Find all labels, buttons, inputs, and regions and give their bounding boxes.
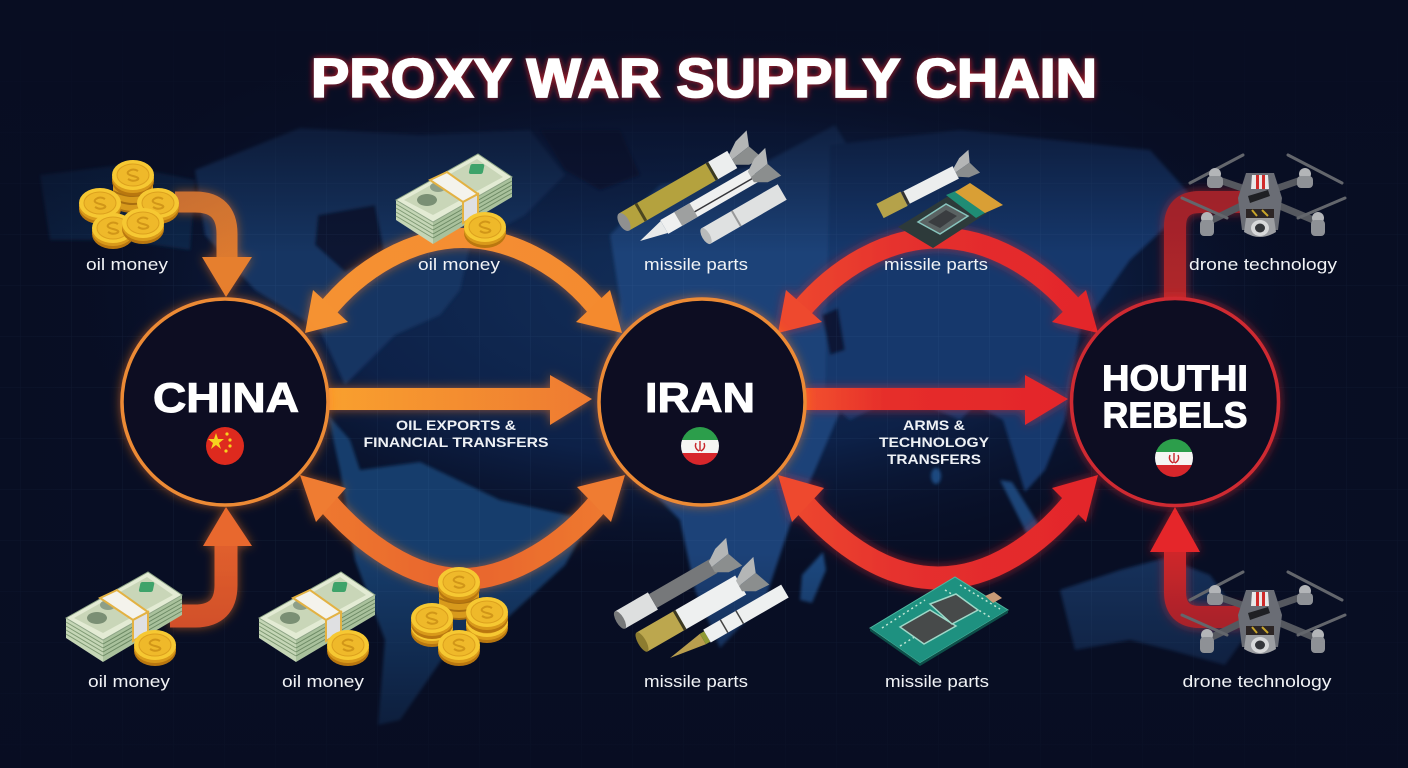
continent: Alaska [40, 165, 195, 250]
continent: Sri Lanka [931, 468, 941, 484]
missile: white warhead [631, 148, 781, 253]
arrow: lower arc between Iran and Houthi rebels [778, 475, 1098, 578]
flow label: oil exports and financial transfers: FINANCIAL TRANSFERS [364, 434, 548, 450]
caption: drone technology top: drone technology [1189, 255, 1338, 274]
caption: oil money top left: oil money [86, 255, 169, 274]
missile: grey [608, 538, 742, 634]
circuit board: dark [898, 183, 1003, 248]
caption: oil money bottom left: oil money [88, 672, 171, 691]
arrow: upper arc between China and Iran [305, 238, 622, 333]
flag: Houthi rebels [1155, 439, 1193, 477]
missile: small [873, 150, 980, 221]
dark seas [315, 205, 385, 272]
continent: Asia [825, 130, 1195, 492]
title: PROXY WAR SUPPLY CHAIN [311, 47, 1097, 109]
labels: item captions [86, 255, 1338, 691]
caption: drone technology bottom: drone technology [1182, 672, 1332, 691]
caption: missile parts bottom left: missile parts [644, 672, 748, 691]
flow label: arms and technology transfers: ARMS & [903, 417, 965, 433]
flow label: oil exports and financial transfers: OIL EXPORTS & [396, 417, 516, 433]
continent: Australia [1060, 558, 1250, 665]
flag: China [205, 426, 245, 466]
arrow: oil money into China from top [175, 202, 252, 297]
icon: drone top [1182, 155, 1345, 237]
missile: white tube [698, 184, 787, 246]
node label: Houthi rebels: HOUTHI [1102, 358, 1248, 398]
caption: oil money bottom second: oil money [282, 672, 365, 691]
node: China [122, 299, 328, 505]
arrow: lower arc between China and Iran [300, 475, 625, 579]
caption: oil money top centre: oil money [418, 255, 501, 274]
node: Houthi rebels [1072, 298, 1278, 506]
icon: drone bottom [1182, 572, 1345, 654]
caption: missile parts bottom right: missile parts [885, 672, 989, 691]
arrow: upper arc between Iran and Houthi rebels [778, 238, 1098, 333]
flag: Iran [681, 427, 719, 465]
node label: China: CHINA [153, 374, 299, 421]
caption: missile parts top right: missile parts [884, 255, 988, 274]
continent: Sumatra [1000, 480, 1042, 540]
continent: Europe and Africa [610, 125, 880, 648]
icon: missile and circuit board top right [873, 150, 1003, 248]
icon: missile parts top left [611, 130, 787, 253]
continent: North America [195, 128, 565, 385]
continent: Central and South America [328, 415, 590, 725]
flow label: arms and technology transfers: TECHNOLOGY [879, 434, 990, 450]
missile: gold cylinder [611, 130, 763, 237]
flow label: arms and technology transfers: TRANSFERS [887, 451, 981, 467]
icon: circuit board bottom [870, 577, 1008, 666]
arrows: orange flows [170, 202, 625, 616]
arrow: Iran to Houthi rebels [806, 375, 1068, 425]
icon: missile parts bottom left [608, 538, 789, 664]
node label: Iran: IRAN [645, 374, 755, 421]
missile: white and gold [630, 557, 769, 656]
icon: cash bundle bottom second [259, 572, 375, 666]
arrows: red flows [778, 202, 1245, 617]
icon: cash bundle bottom left [66, 572, 182, 666]
continent: Madagascar [800, 552, 826, 603]
node: Iran [599, 299, 805, 505]
caption: missile parts top left: missile parts [644, 255, 748, 274]
arrow: oil money into China from bottom [170, 507, 252, 616]
arrow: drone technology into Houthi rebels bottom [1150, 507, 1245, 617]
icon: coin pile top left [79, 160, 179, 249]
icon: cash bundle top centre [396, 154, 512, 248]
missile: thin with gold tip [666, 585, 789, 664]
node label: Houthi rebels: REBELS [1102, 394, 1248, 436]
icon: coin pile bottom centre [411, 567, 508, 666]
arrow: drone technology from Houthi rebels top [1175, 202, 1245, 302]
arrow: China to Iran [329, 375, 592, 425]
